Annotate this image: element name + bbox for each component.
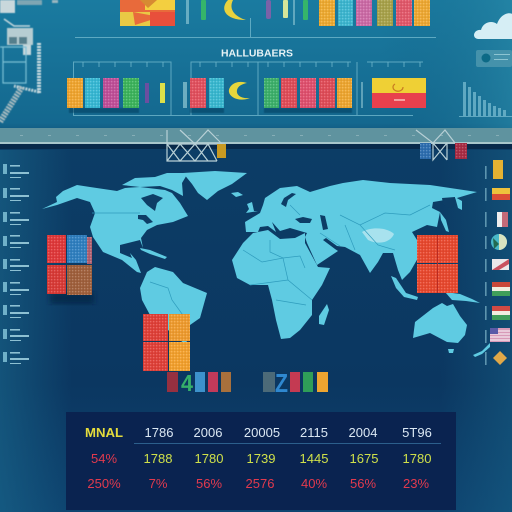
red row: 23% (403, 476, 429, 491)
truss left (167, 130, 225, 161)
yellow row: 1788 (144, 451, 172, 466)
red row: 250% (87, 476, 121, 491)
red row: 56% (196, 476, 222, 491)
container stack south (143, 314, 190, 371)
south america (140, 267, 207, 345)
flag yellow red (492, 188, 510, 200)
kamchatka (455, 197, 462, 210)
top row bars and crescent (186, 0, 308, 25)
kamchatka gap (442, 197, 455, 209)
header row: 2006 (194, 425, 222, 440)
small coloured blocks left: 4 (181, 370, 193, 396)
header row: 2115 (300, 425, 328, 440)
uk (246, 202, 258, 213)
yellow row: 1780 (195, 451, 223, 466)
yellow row: 1445 (300, 451, 328, 466)
crescent (229, 82, 250, 100)
world map (42, 171, 490, 357)
small side label (361, 82, 363, 108)
new zealand (473, 343, 490, 357)
yellow row (91, 451, 431, 466)
header row: 20005 (244, 425, 280, 440)
australia (413, 303, 467, 343)
caspian sea (320, 215, 328, 230)
header row (85, 425, 432, 440)
cuba (140, 248, 167, 259)
header row: 1786 (145, 425, 173, 440)
red row: 40% (301, 476, 327, 491)
red row: 7% (149, 476, 168, 491)
flag tricolour two (492, 306, 510, 320)
yellow box (217, 144, 226, 158)
container stack west (47, 235, 94, 304)
flag yellow (493, 160, 503, 179)
red row: 56% (350, 476, 376, 491)
top row containers (319, 0, 430, 26)
frame lines (73, 18, 436, 116)
country flag column (490, 160, 510, 365)
great lakes (138, 215, 153, 224)
small bar chart (459, 82, 512, 117)
table panel (66, 412, 456, 510)
header row: MNAL (85, 425, 123, 440)
container stack east (417, 235, 458, 293)
info badge (476, 50, 512, 67)
black sea (295, 217, 312, 223)
middle row containers (67, 78, 352, 113)
africa (232, 230, 330, 339)
top-left lattice structure (0, 0, 58, 122)
sakhalin (440, 212, 449, 232)
diamond badge (493, 351, 507, 365)
flag tricolour one (492, 282, 510, 296)
cloud icon (474, 13, 512, 39)
title: HALLUBAERS (221, 48, 293, 60)
iceland (231, 192, 243, 197)
yellow row: 54% (91, 451, 117, 466)
indonesia (391, 276, 418, 300)
small coloured blocks left (167, 370, 231, 396)
arctic islands (122, 173, 188, 196)
red row: 2576 (246, 476, 274, 491)
red row (87, 476, 429, 491)
hudson bay (141, 194, 163, 211)
greenland (183, 171, 247, 200)
tasmania (448, 349, 454, 353)
eurasia (245, 180, 477, 280)
right truss boxes (420, 143, 467, 159)
madagascar (319, 304, 329, 325)
yellow row: 1675 (350, 451, 378, 466)
tibet highlight (362, 228, 394, 243)
baltic sea (281, 193, 296, 207)
flag stripes (490, 328, 510, 342)
globe badge (491, 234, 507, 250)
header row: 5T96 (402, 425, 432, 440)
data table (66, 412, 456, 510)
flag pink white (497, 212, 508, 227)
header row: 2004 (349, 425, 377, 440)
left column legend (3, 164, 29, 364)
horizontal band (0, 128, 512, 149)
flag diagonal (492, 259, 509, 270)
flag side labels (485, 166, 487, 365)
yellow row: 1739 (247, 451, 275, 466)
middle flag (372, 78, 426, 108)
yellow row: 1780 (403, 451, 431, 466)
small coloured blocks right (263, 368, 328, 398)
country borders (92, 205, 430, 325)
truss right (416, 130, 455, 160)
north america (42, 185, 188, 273)
new guinea (445, 292, 480, 303)
small coloured blocks right: Z (275, 368, 288, 398)
top flag (120, 0, 175, 26)
